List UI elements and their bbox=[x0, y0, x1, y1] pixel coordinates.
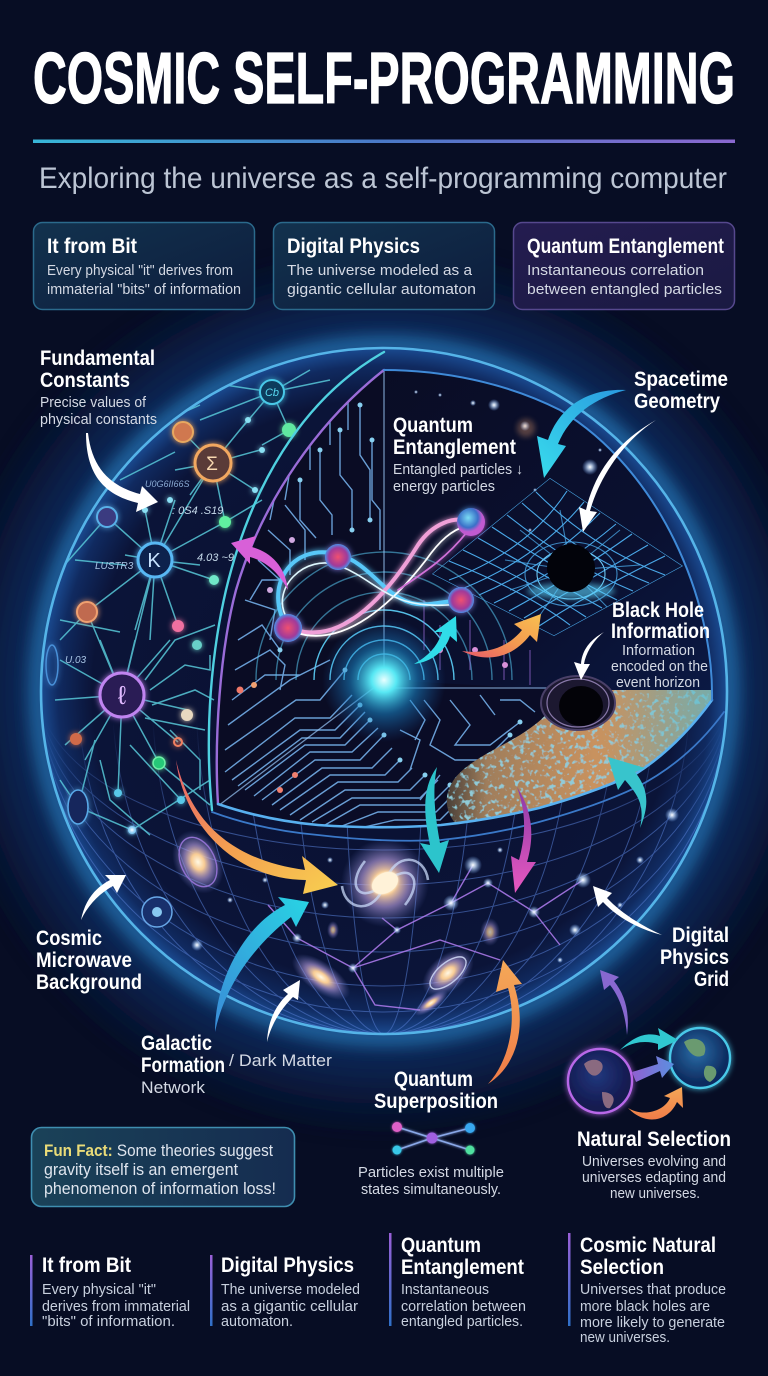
card: Digital Physics bbox=[274, 222, 494, 310]
arrow: fundamental constants bbox=[86, 433, 158, 512]
label: Spacetime Geometry: Spacetime bbox=[634, 368, 728, 391]
label: Galactic Formation: / Dark Matter bbox=[229, 1051, 332, 1070]
label: Black Hole Information: encoded on the bbox=[611, 658, 708, 675]
bottom column: Quantum Entanglement: entangled particles. bbox=[401, 1313, 523, 1330]
arrow: black hole bbox=[574, 632, 604, 680]
constant glyphs and values: U0G6II66S bbox=[145, 479, 190, 489]
bottom column: It from Bit bbox=[30, 1254, 190, 1330]
constant glyphs and values: U.03 bbox=[65, 655, 87, 666]
label: Black Hole Information: event horizon bbox=[616, 674, 700, 691]
space panel background bbox=[384, 371, 711, 690]
label: Quantum Entanglement: Entanglement bbox=[393, 436, 516, 459]
arrow: magenta bbox=[231, 536, 288, 590]
label: Cosmic Microwave Background: Cosmic bbox=[36, 927, 102, 950]
card: Digital Physics: Digital Physics bbox=[287, 235, 420, 258]
sphere outer glow bbox=[38, 345, 730, 1037]
bottom column: Digital Physics: as a gigantic cellular bbox=[221, 1298, 358, 1315]
card: Digital Physics: The universe modeled as a bbox=[287, 262, 473, 279]
entanglement infinity loop bbox=[274, 508, 485, 642]
subtitle: Exploring the universe as a self-programming computer bbox=[39, 162, 727, 195]
label: Spacetime Geometry: Geometry bbox=[634, 390, 720, 413]
bottom column: Cosmic Natural Selection bbox=[568, 1233, 726, 1346]
constant glyphs and values: 4.03 ~9 bbox=[197, 552, 234, 564]
top concept cards bbox=[34, 222, 734, 310]
bottom column: Digital Physics: The universe modeled bbox=[221, 1281, 360, 1298]
bottom column: Quantum Entanglement: Quantum bbox=[401, 1234, 481, 1257]
label: Natural Selection: Natural Selection bbox=[577, 1128, 731, 1151]
stars in space panel bbox=[414, 390, 602, 532]
bottom column: Digital Physics: automaton. bbox=[221, 1313, 293, 1330]
bottom column: Cosmic Natural Selection: Universes that produce bbox=[580, 1281, 726, 1298]
event horizon black hole bbox=[541, 676, 615, 730]
bottom column: It from Bit: derives from immaterial bbox=[42, 1298, 190, 1315]
label: Digital Physics Grid bbox=[660, 924, 729, 991]
label: Spacetime Geometry bbox=[634, 368, 728, 413]
wedge dividers bbox=[218, 370, 560, 806]
card: Quantum Entanglement: Instantaneous correlation bbox=[527, 262, 704, 279]
left shell network panel bbox=[46, 370, 330, 835]
label: Galactic Formation: Formation bbox=[141, 1054, 225, 1077]
arrow: teal down bbox=[420, 767, 449, 873]
bottom column: Cosmic Natural Selection: more likely to generate bbox=[580, 1314, 725, 1331]
bottom column: Digital Physics: Digital Physics bbox=[221, 1254, 354, 1277]
label: Cosmic Microwave Background bbox=[36, 927, 142, 994]
constant glyphs and values: ℓ bbox=[118, 680, 127, 710]
bottom column: Quantum Entanglement bbox=[389, 1233, 526, 1330]
card: Quantum Entanglement: Quantum Entanglement bbox=[527, 235, 724, 258]
arrow: galactic bbox=[267, 980, 300, 1042]
label: Quantum Superposition: Quantum bbox=[394, 1068, 473, 1091]
card: It from Bit: immaterial "bits" of information bbox=[47, 281, 241, 298]
circuit panel background bbox=[220, 691, 338, 803]
card: Quantum Entanglement bbox=[514, 222, 734, 310]
label: Quantum Entanglement: Entangled particles ↓ bbox=[393, 461, 523, 478]
label: Fundamental Constants: physical constants bbox=[40, 411, 157, 428]
label: Digital Physics Grid: Grid bbox=[694, 968, 729, 991]
callout: fun fact: phenomenon of information loss! bbox=[44, 1179, 276, 1198]
arrow: orange to mesh bbox=[462, 614, 541, 658]
CMB map bbox=[447, 690, 716, 823]
constant glyphs and values: K bbox=[147, 550, 161, 572]
constant glyphs and values: Σ bbox=[206, 454, 218, 475]
bottom column: Quantum Entanglement: Entanglement bbox=[401, 1256, 524, 1279]
constant glyphs and values: Cb bbox=[265, 387, 279, 399]
spacetime mesh bbox=[432, 478, 683, 636]
arrow: to particle bbox=[414, 616, 457, 664]
spacetime black hole bbox=[547, 544, 595, 592]
bottom column: It from Bit: "bits" of information. bbox=[42, 1313, 175, 1330]
label: Quantum Entanglement bbox=[393, 414, 523, 495]
bottom column: Quantum Entanglement: Instantaneous bbox=[401, 1281, 489, 1298]
bottom column: Cosmic Natural Selection: new universes. bbox=[580, 1329, 670, 1346]
sphere outer rim bbox=[41, 348, 727, 1034]
constant glyphs and values: LUSTR3 bbox=[95, 561, 134, 572]
label: Digital Physics Grid: Digital bbox=[672, 924, 729, 947]
constant glyphs and values: : 0S4 .S19 bbox=[172, 505, 223, 517]
label: Black Hole Information bbox=[611, 599, 710, 691]
network nodes bbox=[46, 380, 296, 834]
label: Galactic Formation: Network bbox=[141, 1078, 206, 1097]
arrow: teal up bbox=[608, 757, 646, 828]
sphere lat-long grid bbox=[47, 731, 722, 1033]
bottom column: It from Bit: Every physical "it" bbox=[42, 1281, 156, 1298]
label: Black Hole Information: Black Hole bbox=[612, 599, 704, 622]
arrow: cosmic background bbox=[81, 875, 126, 920]
icon: superposition particles bbox=[392, 1122, 475, 1154]
title rule bbox=[33, 140, 735, 143]
arrow: large cyan bbox=[215, 897, 309, 1032]
label: Natural Selection: Universes evolving and bbox=[582, 1153, 726, 1170]
label: Fundamental Constants: Fundamental bbox=[40, 347, 155, 370]
label: Quantum Superposition bbox=[358, 1068, 504, 1198]
wedge interior bbox=[218, 371, 712, 826]
sphere disc bbox=[41, 348, 727, 1034]
card: It from Bit: Every physical "it" derives from bbox=[47, 262, 233, 279]
label: Cosmic Microwave Background: Background bbox=[36, 971, 142, 994]
label: Quantum Superposition: Particles exist multiple bbox=[358, 1164, 504, 1181]
label: Cosmic Microwave Background: Microwave bbox=[36, 949, 132, 972]
icon: two universes bbox=[568, 1028, 730, 1119]
bottom column: Digital Physics bbox=[210, 1254, 360, 1330]
label: Quantum Entanglement: energy particles bbox=[393, 478, 495, 495]
arrow: purple bbox=[600, 970, 628, 1035]
bottom column: Cosmic Natural Selection: more black holes are bbox=[580, 1298, 710, 1315]
label: Black Hole Information: Information bbox=[622, 642, 695, 659]
core glow bbox=[322, 618, 446, 742]
arrow: magenta down bbox=[511, 787, 536, 893]
bottom column: Cosmic Natural Selection: Selection bbox=[580, 1256, 664, 1279]
bottom column: Cosmic Natural Selection: Cosmic Natural bbox=[580, 1234, 716, 1257]
label: Quantum Superposition: Superposition bbox=[374, 1090, 498, 1113]
label: Natural Selection bbox=[577, 1128, 731, 1202]
arrow: spacetime white bbox=[579, 420, 656, 532]
arrow: large yellow bbox=[176, 760, 338, 894]
card: Digital Physics: gigantic cellular automaton bbox=[287, 281, 476, 298]
label: Quantum Entanglement: Quantum bbox=[393, 414, 473, 437]
card: Quantum Entanglement: between entangled particles bbox=[527, 281, 722, 298]
bottom column: Quantum Entanglement: correlation between bbox=[401, 1298, 526, 1315]
callout: fun fact bbox=[32, 1128, 294, 1206]
circuit traces bbox=[225, 400, 535, 828]
label: Galactic Formation bbox=[141, 1032, 332, 1097]
label: Natural Selection: new universes. bbox=[610, 1185, 700, 1202]
card: It from Bit: It from Bit bbox=[47, 235, 137, 258]
label: Black Hole Information: Information bbox=[611, 620, 710, 643]
card: It from Bit bbox=[34, 222, 254, 310]
label: Natural Selection: universes edapting and bbox=[582, 1169, 726, 1186]
label: Digital Physics Grid: Physics bbox=[660, 946, 729, 969]
galaxies and cosmic web bbox=[126, 808, 679, 1020]
background glow behind sphere bbox=[0, 251, 768, 1131]
core rings bbox=[256, 552, 512, 680]
arrow: digital grid bbox=[593, 886, 662, 935]
constant glyphs and values bbox=[65, 387, 279, 710]
label: Quantum Superposition: states simultaneously. bbox=[361, 1181, 501, 1198]
label: Fundamental Constants bbox=[40, 347, 157, 428]
entangled particles bbox=[274, 508, 485, 642]
callout: fun fact: Fun Fact: Some theories suggest bbox=[44, 1141, 273, 1160]
sphere bbox=[38, 345, 730, 1037]
arrow: spacetime cyan bbox=[537, 390, 626, 478]
label: Fundamental Constants: Constants bbox=[40, 369, 130, 392]
arrow: superposition bbox=[488, 960, 522, 1084]
wedge rim lines bbox=[209, 352, 724, 841]
label: Fundamental Constants: Precise values of bbox=[40, 394, 147, 411]
bottom column: It from Bit: It from Bit bbox=[42, 1254, 131, 1277]
network traces bbox=[55, 370, 330, 835]
callout: fun fact: gravity itself is an emergent bbox=[44, 1160, 238, 1179]
label: Galactic Formation: Galactic bbox=[141, 1032, 212, 1055]
